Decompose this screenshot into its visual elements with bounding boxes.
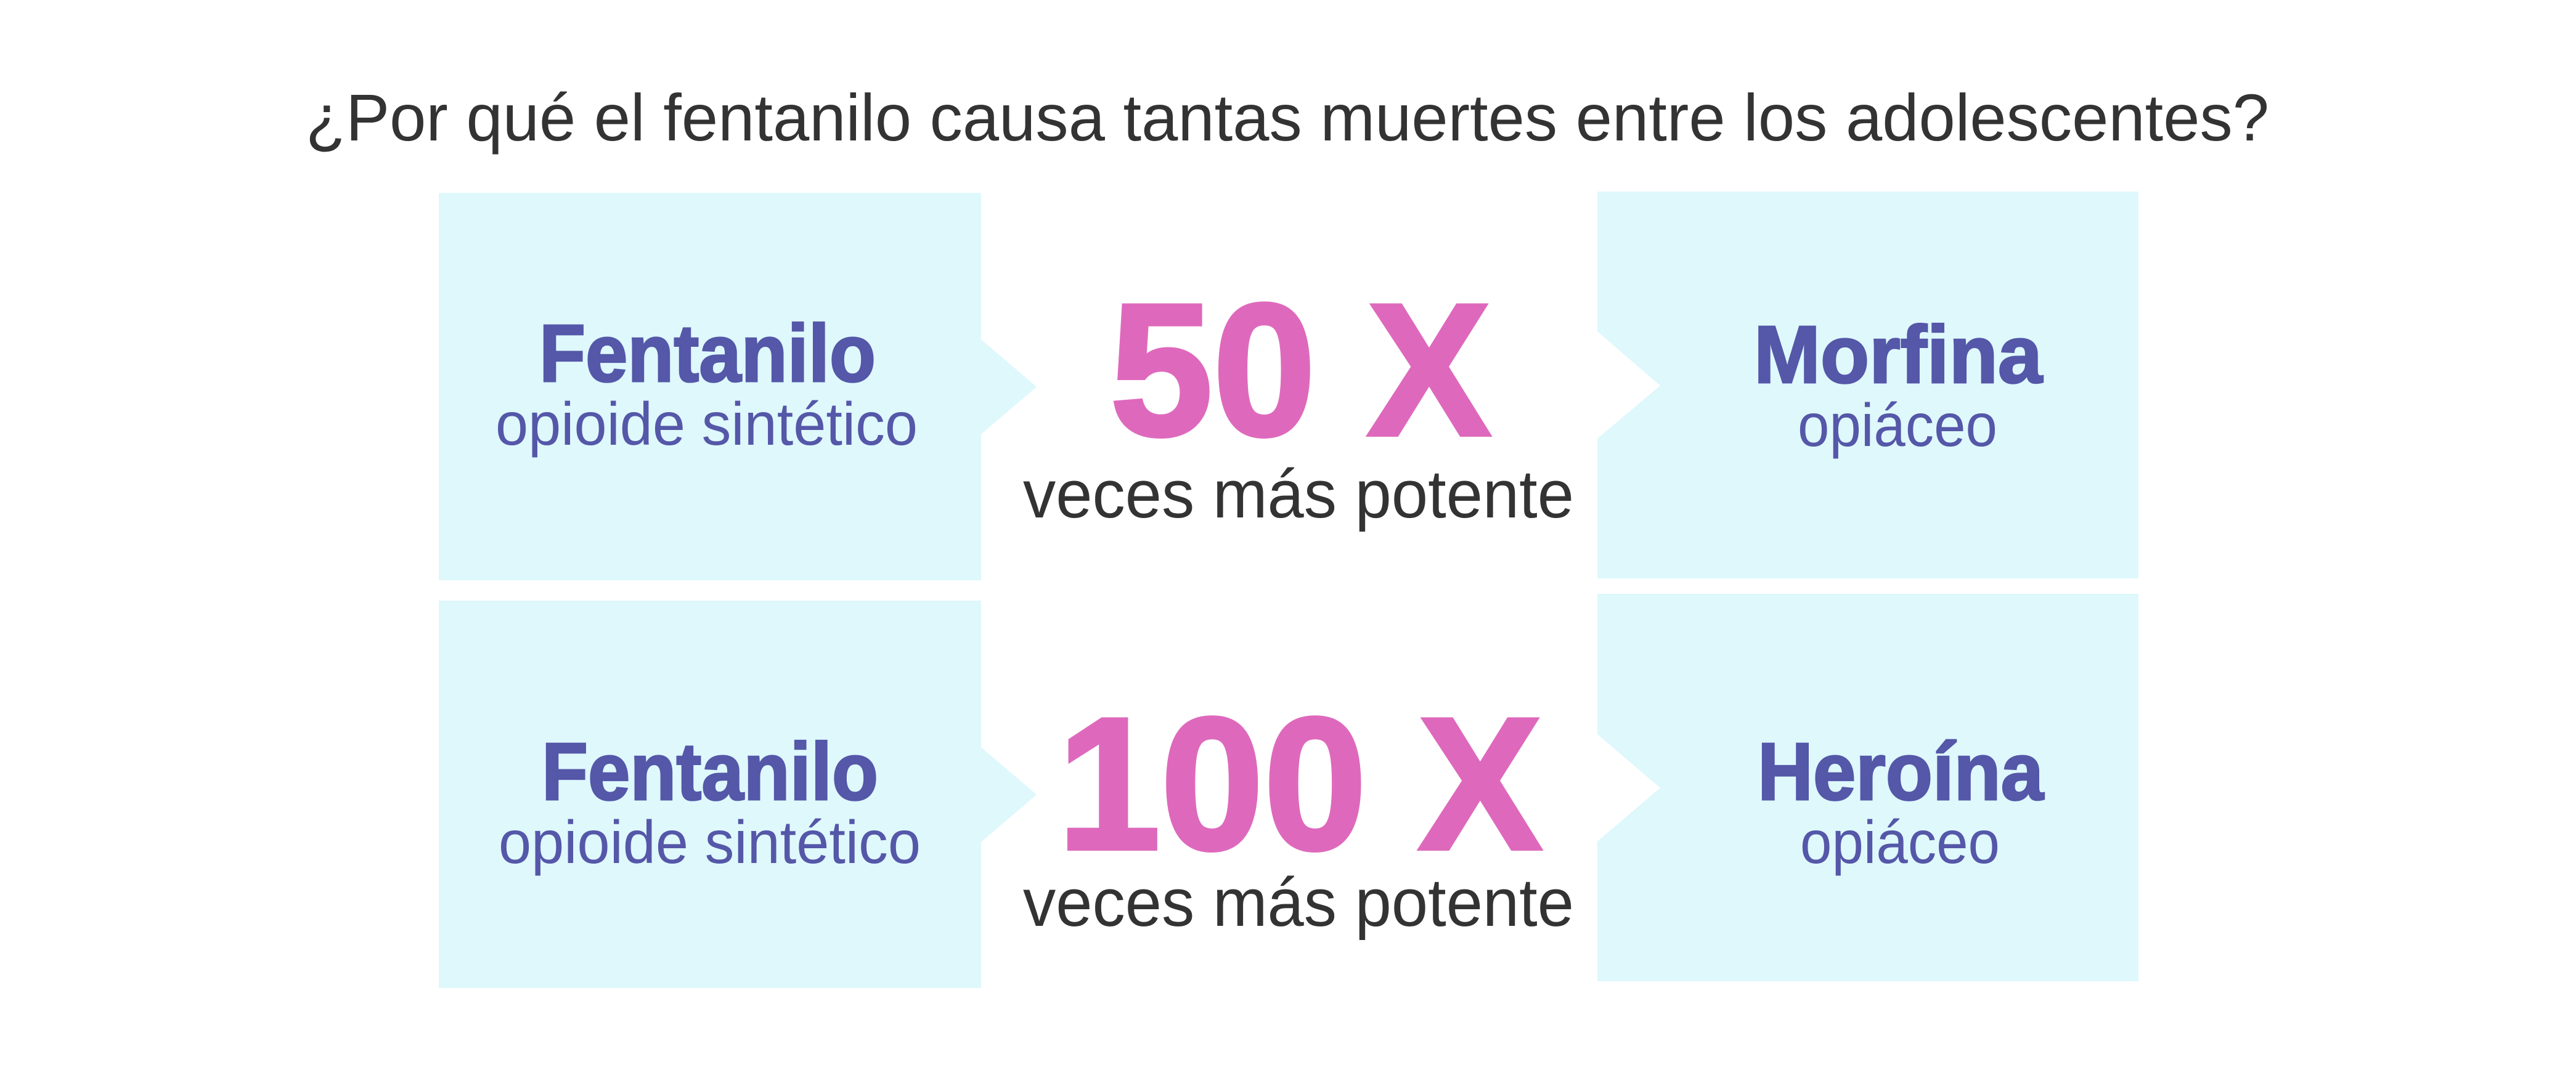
panel: fentanilo row 1 [439, 193, 1037, 580]
caption: veces más potente row 1: veces más potente [1023, 456, 1574, 532]
notched box: morfina [1597, 192, 2138, 578]
sublabel: opioide sintético row 1: opioide sintético [495, 390, 918, 458]
panel: morfina [1597, 192, 2138, 578]
arrow box: fentanilo row 2 [439, 601, 1037, 988]
label: heroína: Heroína [1758, 726, 2044, 817]
big number: 50 X: 50 X [1110, 264, 1491, 475]
title: ¿Por qué el fentanilo causa tantas muertes entre los adolescentes? [306, 80, 2269, 155]
arrow box: fentanilo row 1 [439, 193, 1037, 580]
panel: 100 X comparison [1023, 678, 1574, 941]
sublabel: opiáceo row 1: opiáceo [1798, 391, 1997, 459]
notched box: heroína [1597, 594, 2138, 981]
big number: 100 X: 100 X [1058, 678, 1543, 889]
label: morfina: Morfina [1754, 309, 2044, 400]
label: fentanilo row 2: Fentanilo [542, 726, 878, 817]
panel: heroína [1597, 594, 2138, 981]
panel: fentanilo row 2 [439, 601, 1037, 988]
panel: 50 X comparison [1023, 264, 1574, 532]
label: fentanilo row 1: Fentanilo [539, 308, 876, 399]
sublabel: opioide sintético row 2: opioide sintético [499, 808, 921, 876]
sublabel: opiáceo row 2: opiáceo [1800, 808, 2000, 876]
caption: veces más potente row 2: veces más potente [1023, 865, 1574, 941]
